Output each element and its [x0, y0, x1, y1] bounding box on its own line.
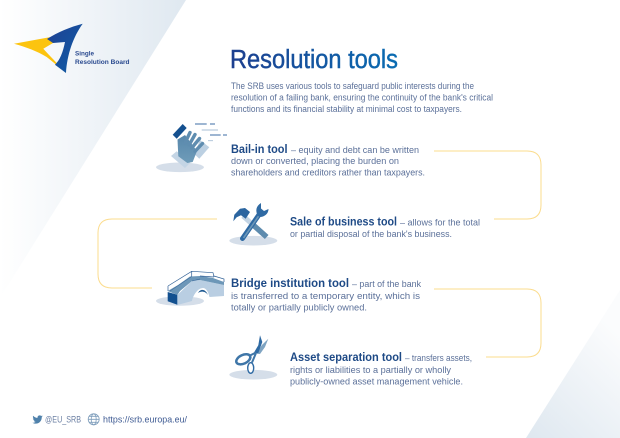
icon: globe	[88, 414, 99, 425]
text: asset separation tool: – transfers assets,	[405, 353, 472, 364]
icon: scissors	[229, 335, 277, 380]
logo: Single Resolution Board	[14, 24, 130, 73]
text: bail-in tool	[231, 142, 425, 178]
background triangle bottom-right	[526, 290, 620, 438]
text: sale of business tool: – allows for the total	[400, 218, 480, 228]
intro text	[231, 81, 493, 115]
title: Resolution tools	[230, 46, 398, 74]
text: bail-in tool: Bail-in tool	[231, 142, 288, 156]
text: bail-in tool: – equity and debt can be written	[291, 145, 419, 156]
text: sale of business tool: or partial disposal of the bank's business.	[290, 229, 452, 240]
background triangle top-left	[0, 0, 186, 298]
intro text: resolution of a failing bank, ensuring the continuity of the bank's critical	[231, 92, 493, 104]
text: bridge institution tool	[231, 276, 421, 314]
intro text: functions and its financial stability at minimal cost to taxpayers.	[231, 104, 462, 115]
connector: bail-in to sale of business	[434, 151, 541, 219]
text: asset separation tool	[290, 350, 472, 388]
text: bridge institution tool: – part of the bank	[352, 279, 421, 290]
twitter handle: @EU_SRB	[45, 414, 81, 426]
icon: bridge	[156, 271, 224, 306]
text: asset separation tool: rights or liabilities to a partially or wholly	[290, 365, 451, 376]
icon: hand bail-in	[156, 124, 227, 172]
icon: twitter bird	[32, 415, 43, 424]
icon: hammer and wrench	[229, 203, 277, 246]
logo mark	[14, 24, 83, 73]
text: bail-in tool: shareholders and creditors rather than taxpayers.	[231, 168, 425, 178]
website url: https://srb.europa.eu/	[103, 414, 187, 426]
logo text: Resolution Board	[75, 59, 130, 66]
text: bridge institution tool: Bridge institution tool	[231, 276, 349, 290]
logo text	[75, 51, 130, 66]
intro text: The SRB uses various tools to safeguard public interests during the	[231, 81, 474, 92]
connector: sale of business to bridge institution	[98, 219, 217, 288]
text: asset separation tool: Asset separation tool	[290, 350, 402, 364]
text: sale of business tool: Sale of business tool	[290, 214, 397, 228]
text: bridge institution tool: is transferred to a temporary entity, which is	[231, 291, 420, 302]
text: bail-in tool: down or converted, placing the burden on	[231, 156, 399, 167]
connector: bridge institution to asset separation	[434, 289, 541, 357]
text: asset separation tool: publicly-owned asset management vehicle.	[290, 376, 463, 388]
logo text: Single	[75, 51, 94, 58]
footer: social and website	[32, 414, 187, 426]
text: sale of business tool	[290, 214, 480, 240]
text: bridge institution tool: totally or partially publicly owned.	[231, 302, 367, 314]
